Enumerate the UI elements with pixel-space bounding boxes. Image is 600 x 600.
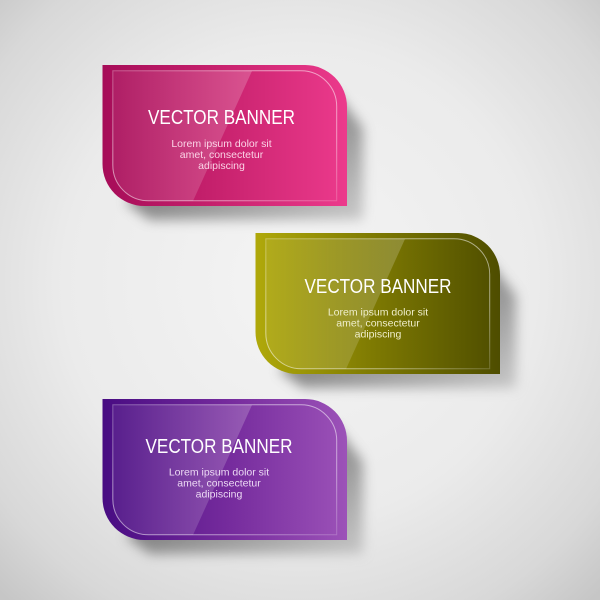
glass glare: pink	[113, 71, 252, 201]
glass glare: purple	[113, 405, 252, 535]
body text: pink: Lorem ipsum dolor sit	[171, 138, 272, 150]
banner body: purple	[102, 399, 347, 540]
banner body: pink	[102, 65, 347, 206]
body text: purple: amet, consectetur	[177, 478, 261, 490]
body text: pink: adipiscing	[198, 160, 245, 172]
body text: purple: Lorem ipsum dolor sit	[169, 466, 269, 478]
inner outline: purple	[113, 405, 337, 535]
banner body: olive	[256, 233, 500, 374]
glass glare: olive	[266, 239, 405, 369]
shadow: olive banner	[278, 260, 516, 388]
banner: pink	[102, 65, 363, 220]
body text: pink: amet, consectetur	[180, 149, 264, 161]
shadow: purple banner	[125, 426, 363, 554]
inner outline: olive	[266, 239, 490, 369]
body text: purple: adipiscing	[196, 488, 243, 500]
inner outline: pink	[113, 71, 337, 201]
body text: olive: amet, consectetur	[336, 318, 420, 330]
title: olive: VECTOR BANNER	[304, 276, 452, 298]
body text: olive: Lorem ipsum dolor sit	[328, 306, 428, 318]
title: purple: VECTOR BANNER	[146, 436, 292, 458]
banner: purple	[102, 399, 363, 554]
title: pink: VECTOR BANNER	[148, 107, 295, 129]
body text: olive: adipiscing	[355, 328, 402, 340]
shadow: pink banner	[125, 92, 363, 220]
banner: olive	[256, 233, 516, 388]
